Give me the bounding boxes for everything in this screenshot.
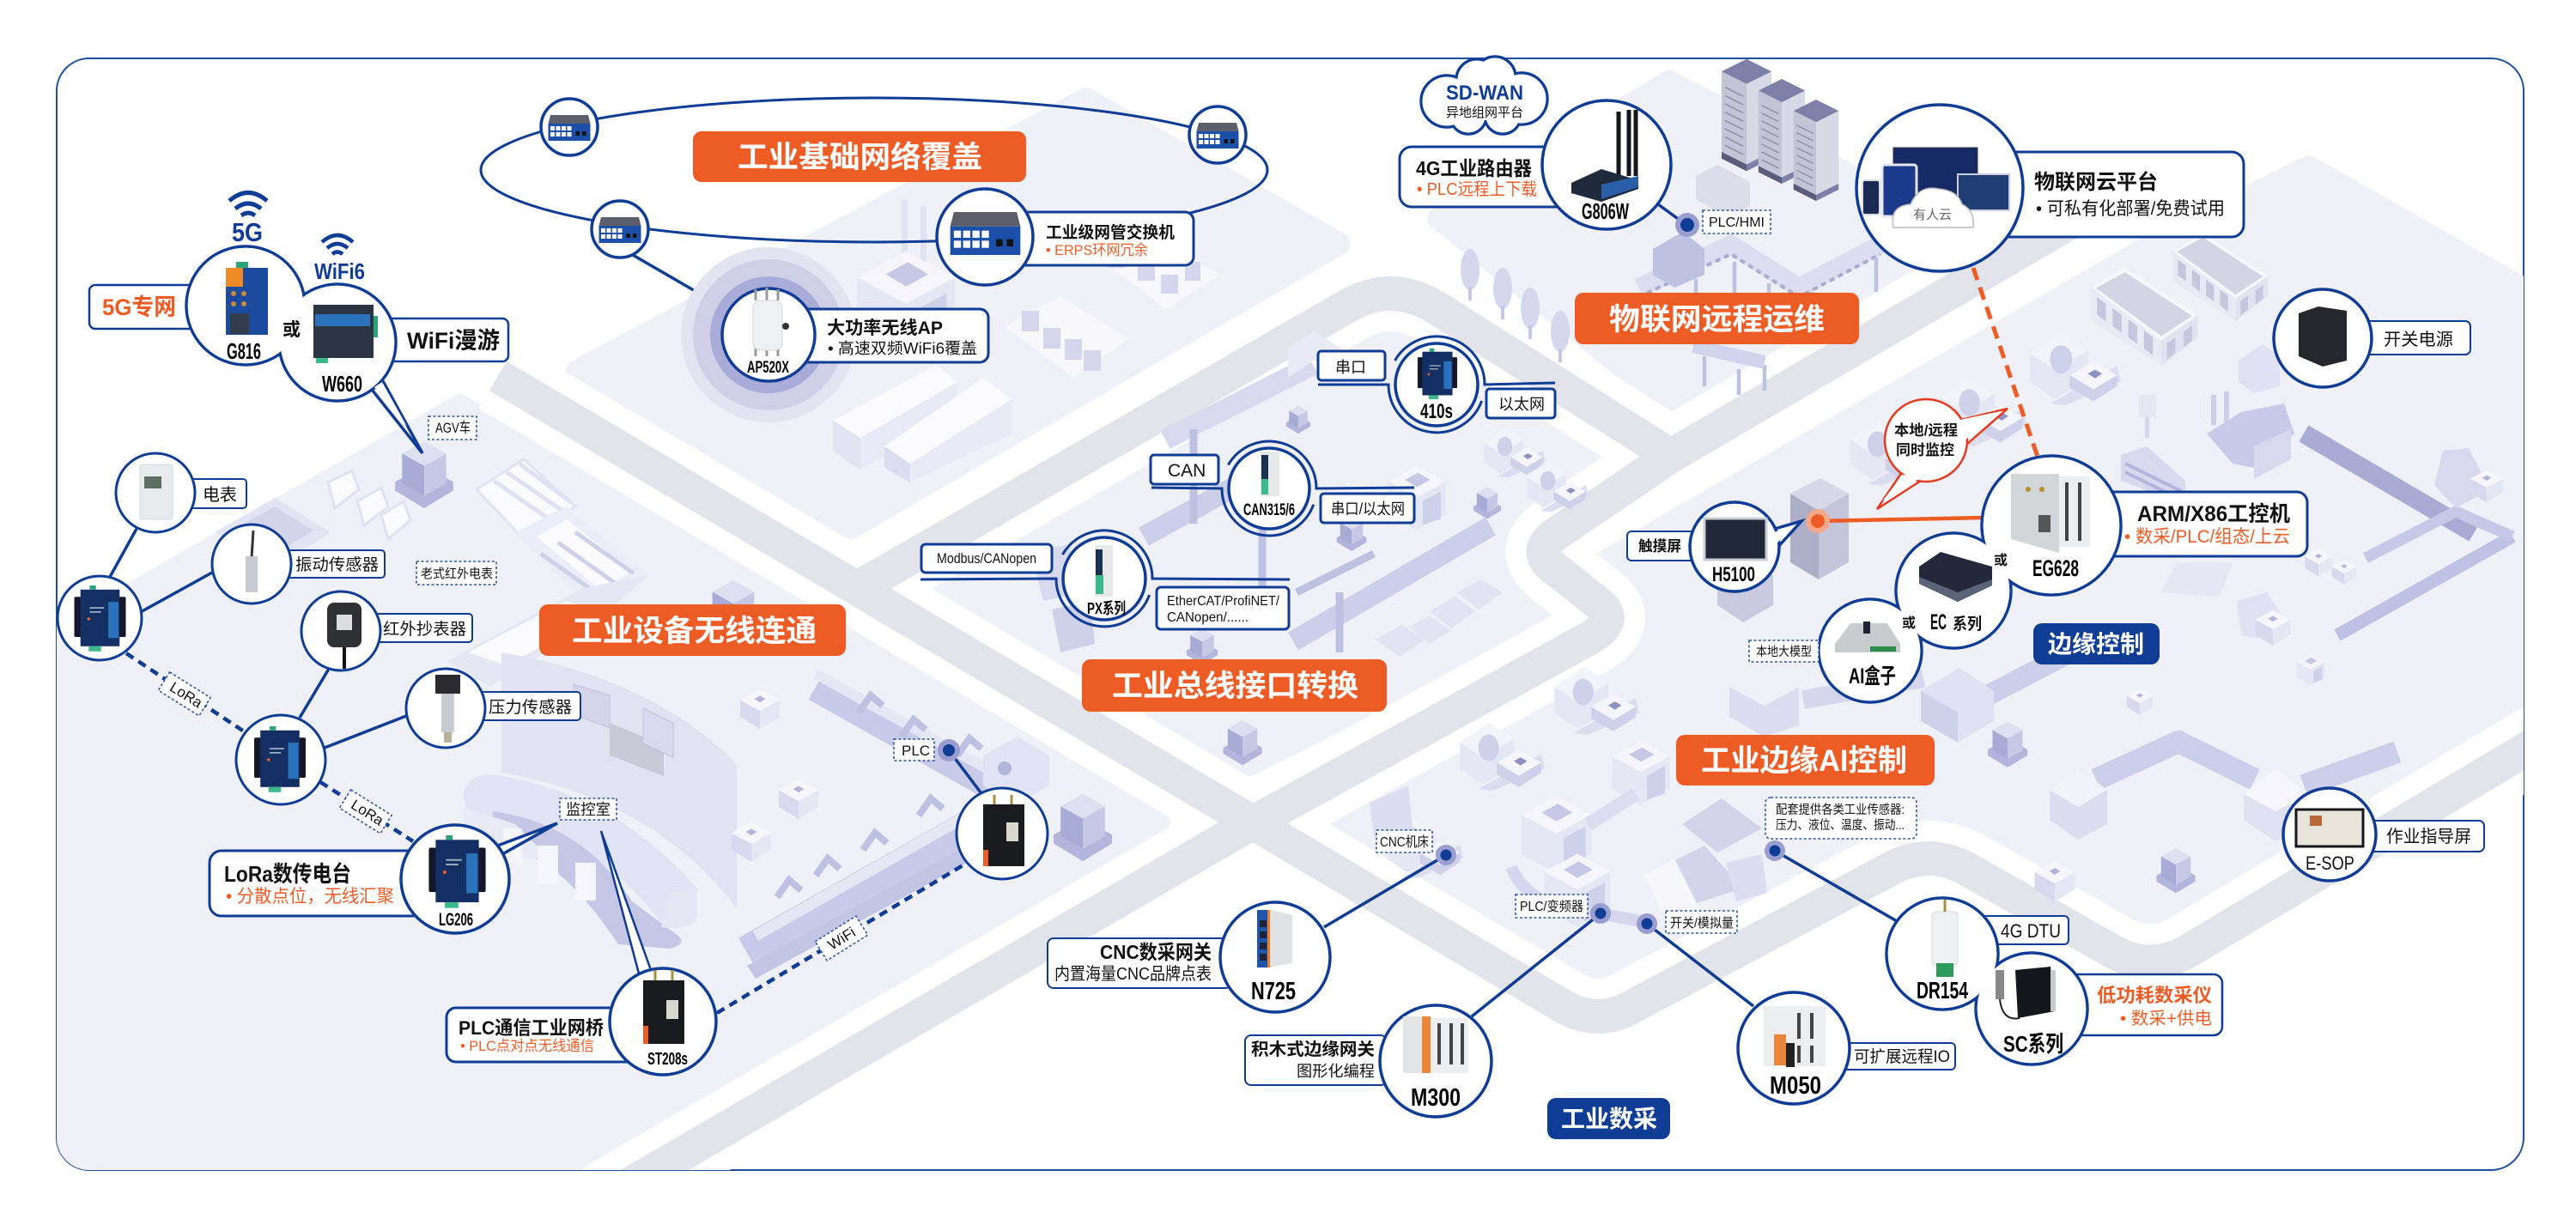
label 监控室: 监控室	[566, 801, 611, 818]
callout: ARM/X86工控机: 或	[1902, 615, 1916, 631]
bridge device circle	[957, 788, 1048, 879]
callout: 大功率无线AP	[681, 247, 988, 422]
title: 物联网远程运维	[1575, 293, 1859, 344]
callout: CAN315/6: 串口/以太网	[1331, 500, 1405, 518]
callout: 物联网云平台: 有人云	[1913, 208, 1952, 222]
label CNC机床	[1376, 830, 1432, 852]
platform screens	[1862, 148, 2009, 227]
callout: CNC数采网关 N725: CNC数采网关	[1100, 941, 1212, 963]
title: 工业边缘AI控制: 工业边缘AI控制	[1701, 744, 1907, 778]
callout: 5G and WiFi	[89, 192, 508, 453]
callout: 振动传感器	[212, 525, 385, 603]
label 开关/模拟量: 开关/模拟量	[1670, 916, 1734, 931]
left conveyors and robots	[732, 674, 1262, 979]
callout: 电表	[116, 453, 246, 532]
callout: PX系列: PX系列	[1087, 599, 1126, 617]
callout: CNC数采网关 N725: 内置海量CNC品牌点表	[1054, 964, 1212, 984]
callout: PX系列	[920, 531, 1290, 629]
label 本地大模型	[1749, 640, 1819, 662]
callout: 4G工业路由器: 4G工业路由器	[1416, 157, 1532, 179]
WiFi link label: WiFi	[825, 924, 859, 953]
title: 工业基础网络覆盖	[693, 131, 1026, 182]
label PLC/变频器: PLC/变频器	[1520, 899, 1583, 914]
callout: 开关电源	[2274, 289, 2470, 387]
callout: E-SOP: 作业指导屏	[2386, 827, 2471, 846]
callout: PX系列: Modbus/CANopen	[937, 550, 1036, 567]
callout: 本地/远程同时监控: 本地/远程	[1894, 422, 1958, 439]
factory illustrations: left	[215, 441, 761, 687]
callout: 电表: 电表	[203, 485, 237, 505]
icon: WiFi6 signal	[322, 235, 353, 254]
callout: 红外抄表器	[301, 591, 472, 670]
callout: 压力传感器	[406, 669, 580, 748]
callout: E-SOP	[2283, 788, 2484, 881]
callout: 5G and WiFi: WiFi6	[314, 258, 365, 284]
callout: 触摸屏 H5100	[1627, 502, 1801, 591]
callout: 4G工业路由器: G806W	[1582, 198, 1629, 224]
callout: 4G DTU and 低功耗数采仪: SC系列	[2003, 1031, 2063, 1057]
title: 工业设备无线连通: 工业设备无线连通	[572, 615, 817, 648]
label 配套传感器	[1765, 798, 1917, 839]
title: 工业数采	[1547, 1098, 1670, 1139]
callout: LoRa数传电台: LG206	[439, 910, 473, 930]
title: 工业总线接口转换	[1082, 659, 1387, 712]
callout: 4G DTU and 低功耗数采仪: DR154	[1917, 977, 1968, 1004]
callout: 410s: 410s	[1420, 400, 1453, 423]
callout: E-SOP: E-SOP	[2306, 852, 2354, 874]
label 开关/模拟量	[1666, 911, 1737, 933]
callout: 振动传感器: 振动传感器	[295, 555, 379, 574]
callout: 4G工业路由器: • PLC远程上下载	[1417, 179, 1537, 199]
callout: ARM/X86工控机: EC	[1930, 610, 1947, 634]
callout: PLC通信工业网桥: PLC通信工业网桥	[459, 1017, 604, 1039]
dots on the data acquisition block	[1436, 840, 1785, 934]
callout: 5G and WiFi: 或	[283, 319, 301, 340]
callout: ARM/X86工控机: 系列	[1953, 615, 1982, 634]
icon: 5G signal	[229, 192, 267, 215]
LoRa node 1	[58, 576, 142, 660]
callout: PLC通信工业网桥	[447, 831, 716, 1075]
roads	[489, 239, 2524, 1170]
callout: CAN315/6	[1151, 441, 1414, 536]
callout: 5G and WiFi: 5G	[232, 217, 263, 247]
callout: ARM/X86工控机: • 数采/PLC/组态/上云	[2124, 527, 2290, 547]
edge control line	[1729, 651, 2074, 767]
callout: 可扩展远程IO M050: 可扩展远程IO	[1854, 1047, 1950, 1066]
callout: PLC通信工业网桥: • PLC点对点无线通信	[460, 1038, 594, 1054]
callout: 积木式边缘网关 M300	[1245, 1005, 1492, 1117]
label 老式红外电表	[416, 561, 496, 585]
LoRa link label 2: LoRa	[348, 797, 386, 829]
lower centre machines	[1370, 667, 1767, 926]
title: 工业边缘AI控制	[1676, 735, 1935, 785]
PLC/HMI label and dot	[1675, 210, 1771, 237]
PLC label and dot	[894, 739, 960, 761]
callout: 可扩展远程IO M050: M050	[1770, 1072, 1821, 1100]
connector lines	[110, 204, 2038, 1016]
factory illustrations: top centre	[833, 199, 1219, 482]
device DR154	[1932, 900, 1958, 977]
callout: ARM/X86工控机	[1819, 456, 2307, 702]
monitoring room	[464, 652, 737, 949]
callout: SD-WAN cloud: 异地组网平台	[1446, 106, 1523, 120]
device EC	[1919, 552, 1992, 602]
right lower production line	[2034, 742, 2397, 901]
callout: 5G and WiFi: W660	[322, 371, 362, 397]
callout: 触摸屏 H5100: 触摸屏	[1638, 538, 1681, 555]
WiFi link label	[815, 916, 868, 961]
central block machines	[1030, 331, 1589, 664]
LoRa link label 1: LoRa	[167, 679, 205, 712]
title: 边缘控制	[2033, 623, 2160, 664]
callout: ring network	[481, 98, 1267, 258]
label 监控室	[560, 798, 617, 820]
callout: 工业级网管交换机: • ERPS环网冗余	[1046, 242, 1148, 258]
callout: 积木式边缘网关 M300: M300	[1411, 1084, 1461, 1112]
PLC label and dot: PLC	[902, 743, 930, 759]
callout: 物联网云平台: 物联网云平台	[2034, 170, 2158, 194]
callout: 本地/远程同时监控: 同时监控	[1896, 442, 1954, 458]
device G816	[226, 262, 268, 335]
callout: 410s: 串口	[1335, 359, 1366, 376]
callout: 物联网云平台	[1856, 105, 2244, 271]
callout: 4G DTU and 低功耗数采仪	[1886, 898, 2222, 1064]
callout: ARM/X86工控机: EG628	[2032, 555, 2079, 581]
callout: PLC通信工业网桥: ST208s	[647, 1050, 688, 1069]
PLC/HMI label and dot: PLC/HMI	[1709, 215, 1765, 230]
callout: 410s: 以太网	[1498, 396, 1545, 413]
AGV label: AGV车	[435, 420, 471, 436]
callout: 大功率无线AP: 大功率无线AP	[827, 318, 943, 338]
label 老式红外电表: 老式红外电表	[421, 567, 493, 581]
title: 工业总线接口转换: 工业总线接口转换	[1112, 670, 1358, 703]
callout: CAN315/6: CAN315/6	[1243, 501, 1295, 519]
LoRa node 2	[236, 715, 325, 804]
callout: 410s	[1318, 337, 1555, 433]
callout: SD-WAN cloud	[1421, 57, 1547, 134]
callout: 大功率无线AP: AP520X	[747, 359, 789, 377]
AGV label	[428, 416, 477, 440]
callout: 物联网云平台: • 可私有化部署/免费试用	[2036, 199, 2225, 219]
right block machines	[1717, 234, 2512, 715]
callout: PX系列: CANopen/......	[1167, 610, 1249, 625]
callout: 5G and WiFi: WiFi漫游	[407, 328, 500, 354]
device AI box	[1835, 622, 1900, 652]
callout: 积木式边缘网关 M300: 积木式边缘网关	[1251, 1040, 1375, 1059]
callout: SD-WAN cloud: SD-WAN	[1446, 82, 1523, 105]
callout: 本地/远程同时监控	[1877, 399, 2008, 509]
callout: 积木式边缘网关 M300: 图形化编程	[1297, 1063, 1375, 1080]
callout: PX系列: EtherCAT/ProfiNET/	[1167, 594, 1280, 609]
callout: 工业级网管交换机	[937, 189, 1194, 285]
LoRa link label 2	[339, 790, 392, 834]
callout: 红外抄表器: 红外抄表器	[383, 620, 466, 639]
callout: LoRa数传电台	[210, 823, 557, 933]
LoRa link label 1	[158, 672, 210, 716]
title: 工业数采: 工业数采	[1561, 1106, 1657, 1132]
title: 工业设备无线连通	[539, 604, 846, 656]
label CNC机床: CNC机床	[1380, 834, 1429, 850]
device W660	[313, 305, 378, 363]
title: 边缘控制: 边缘控制	[2048, 631, 2144, 658]
title: 物联网远程运维: 物联网远程运维	[1609, 303, 1825, 337]
callout: 5G and WiFi: 5G专网	[102, 294, 176, 320]
orange dot	[1806, 509, 1830, 533]
device SC	[1996, 967, 2056, 1019]
label 配套传感器: 压力、液位、温度、振动...	[1776, 818, 1905, 833]
callout: LoRa数传电台: • 分散点位，无线汇聚	[226, 887, 394, 907]
callout: 大功率无线AP: • 高速双频WiFi6覆盖	[828, 340, 977, 357]
callout: ARM/X86工控机: AI盒子	[1849, 664, 1896, 688]
callout: 开关电源: 开关电源	[2384, 330, 2453, 349]
callout: 4G DTU and 低功耗数采仪: 低功耗数采仪	[2097, 985, 2212, 1006]
label PLC/变频器	[1516, 895, 1588, 918]
callout: LoRa数传电台: LoRa数传电台	[224, 861, 351, 887]
road edges	[479, 270, 2524, 1170]
callout: CAN315/6: CAN	[1168, 461, 1206, 481]
callout: 4G工业路由器	[1400, 100, 1671, 229]
callout: ARM/X86工控机: ARM/X86工控机	[2137, 502, 2290, 526]
device EG628	[2011, 474, 2090, 553]
callout: 4G DTU and 低功耗数采仪: 4G DTU	[2001, 920, 2061, 942]
callout: 压力传感器: 压力传感器	[489, 698, 572, 717]
callout: CNC数采网关 N725	[1048, 902, 1330, 1012]
callout: 触摸屏 H5100: H5100	[1712, 563, 1755, 586]
callout: 5G and WiFi: G816	[227, 338, 261, 364]
title: 工业基础网络覆盖: 工业基础网络覆盖	[738, 141, 982, 174]
ring switch nodes	[541, 99, 1246, 258]
label 本地大模型: 本地大模型	[1756, 645, 1812, 659]
callout: CNC数采网关 N725: N725	[1251, 978, 1296, 1005]
callout: 可扩展远程IO M050	[1738, 992, 1955, 1104]
callout: 工业级网管交换机: 工业级网管交换机	[1046, 222, 1175, 242]
callout: ARM/X86工控机: 或	[1994, 552, 2008, 568]
callout: 4G DTU and 低功耗数采仪: • 数采+供电	[2120, 1009, 2212, 1028]
top right block: servers and conveyor	[1461, 59, 1880, 395]
label 配套传感器: 配套提供各类工业传感器:	[1776, 803, 1905, 817]
